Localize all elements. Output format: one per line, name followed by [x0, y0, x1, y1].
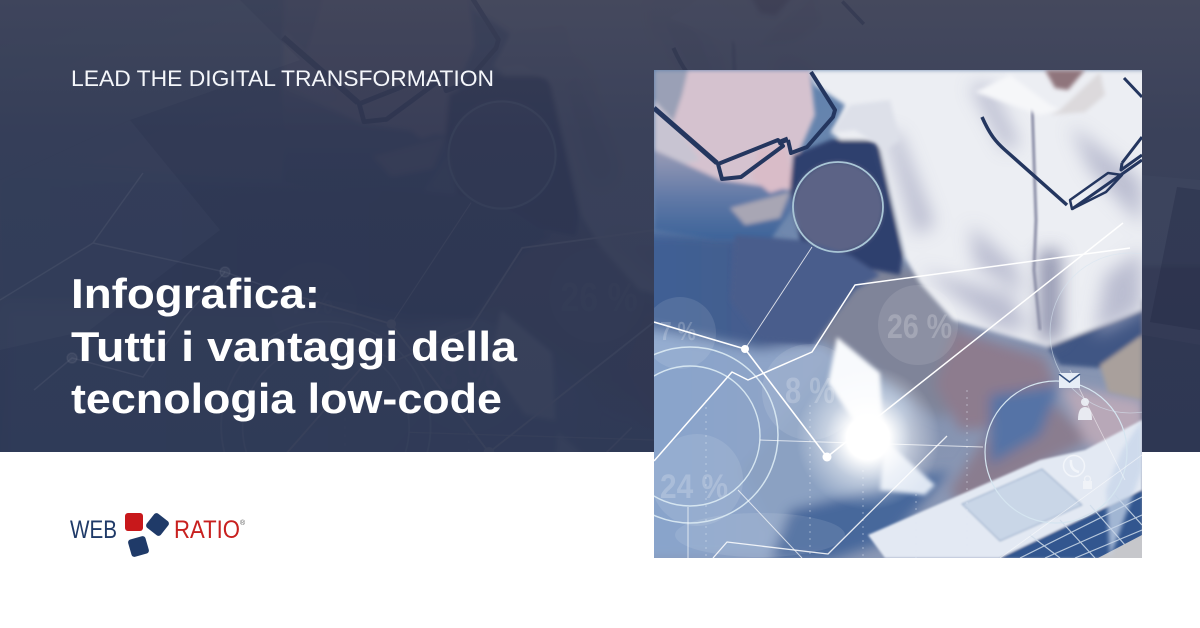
main title: Tutti i vantaggi della [71, 323, 518, 370]
main title [71, 270, 518, 422]
icon: lock [1083, 476, 1092, 489]
background photo, darkened [220, 0, 1200, 452]
lens flare [800, 372, 936, 507]
icon: person [1078, 398, 1092, 420]
photo panel: team with digital overlay [654, 70, 1142, 558]
main title: tecnologia low-code [71, 375, 502, 422]
faint left-hand network lines [0, 173, 282, 390]
dark header band [0, 0, 1200, 452]
main title: Infografica: [71, 270, 320, 317]
registered mark: ® [240, 519, 246, 527]
logo wordmark: WEB: WEB [70, 516, 117, 544]
kicker heading: LEAD THE DIGITAL TRANSFORMATION [71, 66, 494, 91]
icon: envelope [1059, 373, 1080, 388]
logo squares [125, 512, 170, 558]
logo: WebRatio [70, 512, 246, 558]
icon: phone [1064, 456, 1084, 476]
logo wordmark: RATIO: RATIO [174, 516, 240, 544]
blurred laptop on right of band [1142, 175, 1200, 345]
